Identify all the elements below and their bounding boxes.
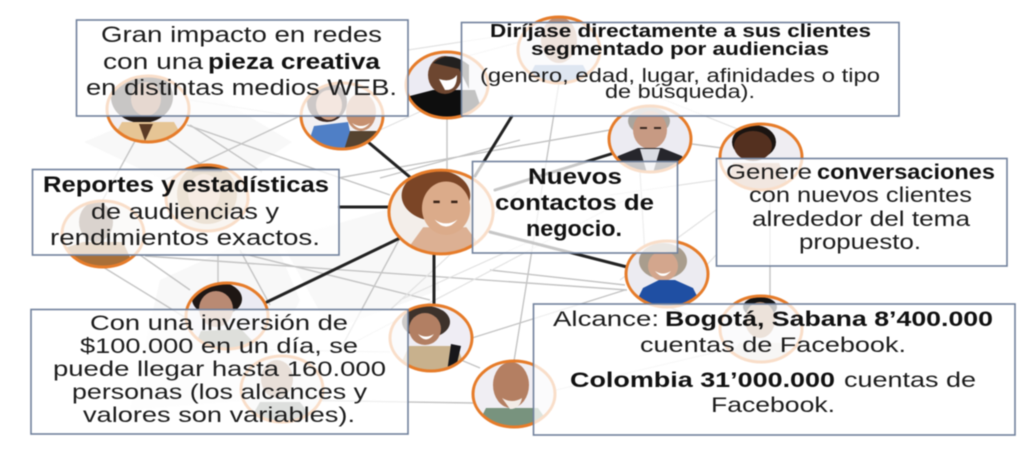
callout: reportes y estadísticas: rendimientos exactos. xyxy=(50,225,320,250)
person: man with dark skin xyxy=(720,124,802,191)
callout: segmentación por audiencias: segmentado por audiencias xyxy=(531,39,829,59)
callout: segmentación por audiencias: (genero, edad, lugar, afinidades o tipo xyxy=(480,66,880,87)
callout: genere conversaciones: propuesto. xyxy=(799,231,921,254)
callout: inversión y alcance estimado: puede llegar hasta 160.000 xyxy=(53,358,386,381)
callout: inversión y alcance estimado: valores son variables). xyxy=(83,404,355,427)
callout: gran impacto: en distintas medios WEB. xyxy=(86,75,397,100)
callout: gran impacto: Gran impacto en redes xyxy=(101,22,382,47)
callout: alcance en Bogotá y Colombia: Alcance: xyxy=(553,308,659,331)
callout: alcance en Bogotá y Colombia: cuentas de xyxy=(844,369,976,392)
callout: genere conversaciones: con nuevos clientes xyxy=(749,184,972,207)
callout: nuevos contactos de negocio: contactos de xyxy=(495,190,654,215)
callout: genere conversaciones: alrededor del tema xyxy=(752,208,970,231)
callout: alcance en Bogotá y Colombia xyxy=(534,304,1015,435)
callout: segmentación por audiencias xyxy=(462,21,899,116)
person: couple xyxy=(301,82,384,150)
callout: gran impacto: pieza creativa xyxy=(208,49,381,74)
person: man at bottom left xyxy=(241,356,323,423)
callout: genere conversaciones: conversaciones xyxy=(817,161,995,184)
person: woman with dark short hair xyxy=(186,282,268,350)
callout: inversión y alcance estimado: Con una inversión de xyxy=(90,312,348,335)
network: thin connection lines xyxy=(100,33,770,403)
person: laughing man in black shirt xyxy=(406,52,488,119)
person: grey-haired man in suit xyxy=(609,106,691,173)
callout: reportes y estadísticas xyxy=(32,170,339,255)
background: faint diamond shapes xyxy=(84,90,440,410)
callout: segmentación por audiencias: de búsqueda). xyxy=(605,82,755,103)
callout: alcance en Bogotá y Colombia: cuentas de Facebook. xyxy=(640,334,906,357)
callout: inversión y alcance estimado: personas (los alcances y xyxy=(72,381,368,404)
person: smiling woman with short curly hair xyxy=(390,305,472,372)
callout: inversión y alcance estimado: $100.000 en un día, se xyxy=(80,335,358,358)
person: man with black hair and white shirt xyxy=(720,296,802,363)
callout: genere conversaciones: Genere xyxy=(726,161,812,184)
person: woman in beige jacket xyxy=(107,71,189,143)
callout: alcance en Bogotá y Colombia: Bogotá, Sabana 8’400.000 xyxy=(665,308,993,331)
callout: alcance en Bogotá y Colombia: Colombia 31’000.000 xyxy=(570,369,835,392)
callout: inversión y alcance estimado xyxy=(31,310,408,434)
person: woman with blonde hair xyxy=(166,164,248,231)
person: older woman in blue blouse xyxy=(626,241,708,308)
callout: nuevos contactos de negocio xyxy=(472,162,678,253)
person: central woman xyxy=(389,170,493,255)
person: man at far left xyxy=(62,201,144,268)
callout: gran impacto xyxy=(76,20,408,116)
callout: nuevos contactos de negocio: Nuevos xyxy=(528,164,622,189)
person: bald man with glasses xyxy=(473,361,555,428)
network: thick spokes from the central person xyxy=(267,116,627,305)
callout: gran impacto: con una xyxy=(103,49,204,74)
callout: genere conversaciones xyxy=(716,158,1007,266)
callout: reportes y estadísticas: Reportes y estadísticas xyxy=(43,172,329,197)
callout: nuevos contactos de negocio: negocio. xyxy=(526,216,622,241)
callout: reportes y estadísticas: de audiencias y xyxy=(91,199,279,224)
callout: alcance en Bogotá y Colombia: Facebook. xyxy=(711,394,835,417)
callout: segmentación por audiencias: Diríjase directamente a sus clientes xyxy=(490,21,871,41)
person: man at top, blue shirt xyxy=(518,17,600,84)
